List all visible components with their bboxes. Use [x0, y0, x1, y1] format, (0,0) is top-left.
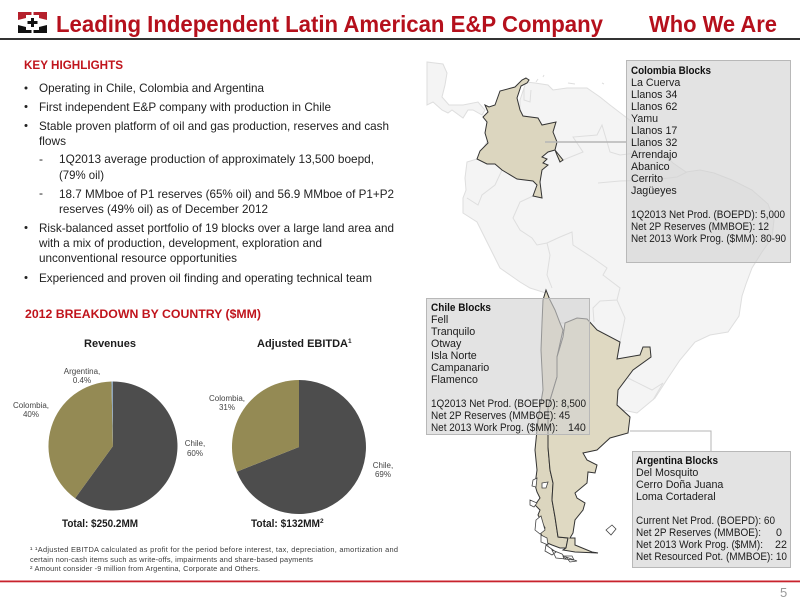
- map: venezuela coast details: [524, 75, 604, 102]
- key highlights list: Stable proven platform of oil and gas production, reserves and cash: [39, 119, 389, 133]
- adjusted EBITDA pie chart: 31%: [219, 403, 235, 412]
- panel: argentina blocks: Current Net Prod. (BOEPD): 60: [636, 515, 775, 527]
- adjusted EBITDA pie chart: 69%: [375, 470, 391, 479]
- footnotes: ² Amount consider -9 million from Argentina, Corporate and Others.: [30, 564, 260, 573]
- map: argentina: [548, 318, 651, 553]
- key highlights list: 18.7 MMboe of P1 reserves (65% oil) and 56.9 MMboe of P1+P2: [59, 187, 394, 201]
- panel: chile blocks: [426, 298, 590, 434]
- key highlights list: Risk-balanced asset portfolio of 19 blocks over a large land area and: [39, 221, 394, 235]
- map: chile: [535, 290, 568, 548]
- panel: chile blocks: Net 2P Reserves (MMBOE): 45: [431, 410, 570, 422]
- panel: colombia blocks: Llanos 17: [631, 125, 677, 137]
- panel: chile blocks: Net 2013 Work Prog. ($MM):: [431, 422, 558, 434]
- panel: argentina blocks: Del Mosquito: [636, 467, 698, 479]
- panel: chile blocks: Campanario: [431, 362, 489, 374]
- title: Leading Independent Latin American E&P Company: [56, 11, 603, 37]
- key highlights list: with a mix of production, development, exploration and: [38, 236, 322, 250]
- adjusted EBITDA pie chart: 1: [348, 338, 352, 345]
- connector: colombia: [545, 141, 626, 143]
- adjusted EBITDA pie chart: [209, 338, 393, 530]
- panel: colombia blocks: Cerrito: [631, 173, 663, 185]
- panel: colombia blocks: Net 2013 Work Prog. ($MM): 80-90: [631, 233, 786, 245]
- key highlights list: Experienced and proven oil finding and operating technical team: [39, 271, 372, 285]
- panel: chile blocks: Fell: [431, 314, 448, 326]
- map: south america landmass: [463, 82, 774, 413]
- panel: colombia blocks: Colombia Blocks: [631, 65, 711, 77]
- panel: argentina blocks: Net Resourced Pot. (MMBOE): 10: [636, 551, 787, 563]
- panel: chile blocks: 1Q2013 Net Prod. (BOEPD): 8,500: [431, 398, 586, 410]
- panel: argentina blocks: Loma Cortaderal: [636, 491, 716, 503]
- panel: chile blocks: Flamenco: [431, 374, 478, 386]
- adjusted EBITDA pie chart: Total: $132MM: [251, 518, 320, 530]
- key highlights list: Operating in Chile, Colombia and Argentina: [39, 81, 264, 95]
- panel: chile blocks: Chile Blocks: [431, 302, 491, 314]
- connector: argentina: [630, 431, 711, 451]
- panel: colombia blocks: Arrendajo: [631, 149, 677, 161]
- panel: colombia blocks: 1Q2013 Net Prod. (BOEPD): 5,000: [631, 209, 785, 221]
- revenues pie chart: Total: $250.2MM: [62, 518, 138, 530]
- revenues pie chart: Chile,: [185, 439, 205, 448]
- map: patagonia islands: [530, 478, 616, 562]
- breakdown heading: 2012 BREAKDOWN BY COUNTRY ($MM): [25, 307, 261, 321]
- map: interior country borders: [467, 125, 687, 400]
- key highlights list: unconventional resource opportunities: [39, 251, 237, 265]
- revenues pie chart: 40%: [23, 410, 39, 419]
- footnotes: [30, 545, 398, 573]
- adjusted EBITDA pie chart: Chile,: [373, 461, 393, 470]
- adjusted EBITDA pie chart: Colombia,: [209, 394, 245, 403]
- panel: colombia blocks: Net 2P Reserves (MMBOE): 12: [631, 221, 769, 233]
- panel: argentina blocks: Net 2P Reserves (MMBOE):: [636, 527, 761, 539]
- key highlights list: reserves (49% oil) as of December 2012: [59, 202, 268, 216]
- revenues pie chart: [13, 338, 205, 530]
- revenues pie chart: 60%: [187, 449, 203, 458]
- panel: chile blocks: Tranquilo: [431, 326, 475, 338]
- adjusted EBITDA pie chart: Adjusted EBITDA: [257, 338, 348, 350]
- panel: argentina blocks: 0: [776, 527, 782, 539]
- panel: argentina blocks: Net 2013 Work Prog. ($MM):: [636, 539, 763, 551]
- logo: [18, 12, 47, 33]
- footnotes: ¹ ¹Adjusted EBITDA calculated as profit for the period before interest, tax, depreciation, amortization and: [30, 545, 398, 554]
- revenues pie chart: Revenues: [84, 338, 136, 350]
- map: colombia: [477, 78, 563, 198]
- panel: chile blocks: 140: [568, 422, 586, 434]
- panel: colombia blocks: Llanos 32: [631, 137, 677, 149]
- footnotes: certain non-cash items such as write-offs, impairments and share-based payments: [30, 555, 313, 564]
- key highlights list: -: [39, 152, 43, 166]
- panel: colombia blocks: Jagüeyes: [631, 185, 677, 197]
- panel: colombia blocks: Yamu: [631, 113, 658, 125]
- revenues pie chart: 0.4%: [73, 376, 91, 385]
- panel: chile blocks: Isla Norte: [431, 350, 477, 362]
- header rule: [0, 38, 800, 40]
- panel: chile blocks: Otway: [431, 338, 462, 350]
- key highlights list: (79% oil): [59, 168, 104, 182]
- key highlights list: [24, 81, 394, 285]
- panel: argentina blocks: Cerro Doña Juana: [636, 479, 723, 491]
- panel: colombia blocks: [626, 60, 790, 262]
- key highlights list: First independent E&P company with production in Chile: [39, 100, 331, 114]
- revenues pie chart: Argentina,: [64, 367, 100, 376]
- key highlights list: -: [39, 186, 43, 200]
- panel: colombia blocks: Llanos 62: [631, 101, 677, 113]
- panel: argentina blocks: [632, 452, 790, 568]
- panel: colombia blocks: La Cuerva: [631, 77, 680, 89]
- panel: colombia blocks: Llanos 34: [631, 89, 677, 101]
- map: central america: [427, 62, 485, 118]
- footer rule: [0, 580, 800, 582]
- panel: argentina blocks: 22: [775, 539, 787, 551]
- section label: who we are: Who We Are: [649, 11, 777, 37]
- panel: argentina blocks: Argentina Blocks: [636, 455, 718, 467]
- key highlights list: 1Q2013 average production of approximately 13,500 boepd,: [59, 152, 374, 166]
- revenues pie chart: Colombia,: [13, 401, 49, 410]
- key highlights list: flows: [39, 134, 66, 148]
- adjusted EBITDA pie chart: 2: [320, 518, 324, 525]
- page number: 5: [780, 585, 787, 600]
- panel: colombia blocks: Abanico: [631, 161, 670, 173]
- map of South America: [427, 62, 774, 562]
- key highlights heading: KEY HIGHLIGHTS: [24, 58, 123, 72]
